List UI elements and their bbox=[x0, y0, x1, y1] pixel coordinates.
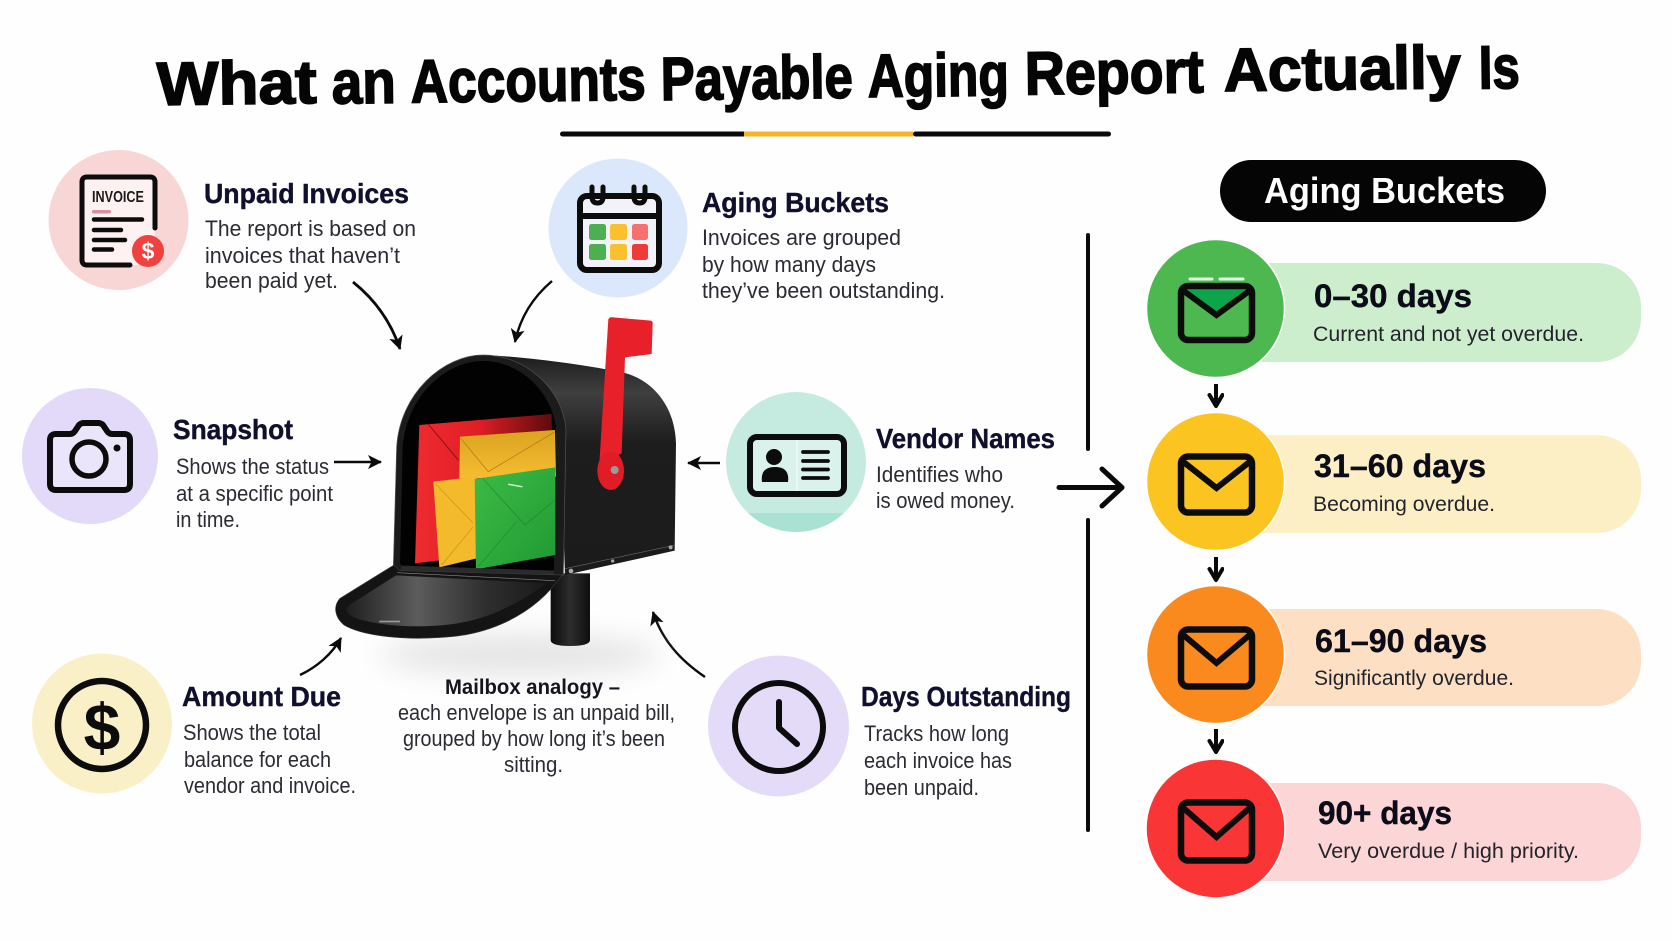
text block bbox=[205, 216, 416, 293]
yellow envelope back bbox=[459, 430, 556, 478]
circle bbox=[1146, 759, 1285, 898]
text block: at a specific point bbox=[176, 481, 333, 506]
mailbox post bbox=[551, 573, 590, 646]
title: Accounts bbox=[410, 45, 646, 115]
mailbox analogy caption: sitting. bbox=[504, 752, 563, 777]
bucket: 31-60 days bbox=[1146, 412, 1641, 550]
description: Becoming overdue. bbox=[1313, 492, 1495, 516]
arrow bbox=[688, 462, 720, 464]
title: an bbox=[331, 48, 396, 116]
bucket: 61-90 days bbox=[1146, 586, 1641, 724]
text block: Shows the status bbox=[176, 454, 329, 479]
text block: vendor and invoice. bbox=[184, 773, 356, 798]
pill bbox=[1216, 435, 1641, 533]
panel: vendor names bbox=[688, 392, 1055, 535]
title: Aging bbox=[867, 40, 1009, 110]
icon: invoice: INVOICE bbox=[92, 189, 144, 206]
panel: unpaid invoices bbox=[48, 150, 416, 349]
heading: Unpaid Invoices bbox=[204, 178, 409, 209]
heading pill: aging buckets: Aging Buckets bbox=[1264, 170, 1505, 211]
label: 90+ days bbox=[1318, 795, 1452, 831]
text block: is owed money. bbox=[876, 488, 1015, 513]
mailbox shadow bbox=[380, 635, 660, 675]
text block bbox=[183, 720, 356, 798]
mailbox opening bbox=[400, 361, 556, 571]
circle bbox=[1146, 412, 1284, 550]
heading pill: aging buckets bbox=[1220, 160, 1546, 222]
mailbox rivets bbox=[565, 545, 674, 573]
icon: dollar coin: $ bbox=[84, 690, 120, 764]
text block bbox=[702, 225, 945, 303]
circle bbox=[1146, 586, 1284, 724]
text block bbox=[864, 721, 1012, 800]
text block: Identifies who bbox=[876, 462, 1003, 487]
mailbox door bbox=[336, 565, 562, 638]
pill bbox=[1216, 783, 1641, 881]
label: 31–60 days bbox=[1314, 448, 1486, 484]
icon: calendar bbox=[548, 158, 688, 298]
heading: Days Outstanding bbox=[861, 681, 1071, 712]
text block bbox=[176, 454, 333, 532]
icon: dollar coin bbox=[32, 654, 172, 794]
icon: invoice bbox=[48, 150, 188, 290]
panel: snapshot bbox=[22, 388, 381, 532]
text block: The report is based on bbox=[205, 216, 416, 241]
green envelope bbox=[475, 467, 555, 569]
mailbox analogy caption: each envelope is an unpaid bill, bbox=[398, 700, 675, 725]
title: Report bbox=[1024, 37, 1204, 107]
title: What bbox=[156, 48, 317, 118]
divider with arrow to buckets bbox=[1059, 235, 1122, 830]
icon: envelope bbox=[1181, 456, 1252, 512]
pill bbox=[1216, 609, 1641, 706]
arrow bbox=[515, 281, 552, 342]
bucket: 90+ days bbox=[1146, 759, 1641, 898]
text block: been unpaid. bbox=[864, 775, 979, 800]
mailbox analogy caption bbox=[398, 676, 675, 777]
label: 0–30 days bbox=[1314, 278, 1472, 314]
text block: they’ve been outstanding. bbox=[702, 278, 945, 303]
circle bbox=[1146, 240, 1284, 378]
title bbox=[156, 33, 1520, 118]
panel: amount due bbox=[32, 638, 356, 798]
description: Current and not yet overdue. bbox=[1313, 322, 1584, 346]
heading: Amount Due bbox=[182, 681, 341, 712]
red envelope bbox=[415, 414, 554, 563]
yellow envelope front bbox=[433, 477, 477, 567]
text block: been paid yet. bbox=[205, 268, 338, 293]
mailbox flag bbox=[597, 317, 653, 490]
icon: invoice: $ bbox=[142, 238, 155, 264]
panel: aging buckets note bbox=[515, 158, 945, 342]
text block: balance for each bbox=[184, 747, 331, 772]
icon: clock bbox=[708, 656, 849, 796]
text block bbox=[876, 462, 1015, 513]
description: Significantly overdue. bbox=[1314, 666, 1514, 690]
text block: each invoice has bbox=[864, 748, 1012, 773]
icon: camera bbox=[22, 388, 158, 524]
icon: envelope bbox=[1181, 802, 1252, 860]
arrow bbox=[1214, 384, 1218, 406]
arrow bbox=[300, 638, 341, 675]
icon: vendor id card bbox=[726, 392, 866, 535]
mailbox front rim bbox=[393, 355, 566, 575]
text block: by how many days bbox=[702, 252, 876, 277]
arrow bbox=[334, 461, 381, 463]
heading: Aging Buckets bbox=[702, 187, 889, 218]
heading: Snapshot bbox=[173, 414, 293, 445]
pill bbox=[1216, 263, 1641, 362]
text block: Shows the total bbox=[183, 720, 321, 745]
mailbox inner floor bbox=[400, 566, 554, 577]
heading: Vendor Names bbox=[876, 423, 1055, 454]
mailbox analogy caption: grouped by how long it’s been bbox=[403, 726, 665, 751]
description: Very overdue / high priority. bbox=[1318, 839, 1579, 863]
label: 61–90 days bbox=[1315, 623, 1487, 659]
title: Actually bbox=[1223, 33, 1461, 104]
mailbox illustration bbox=[336, 317, 676, 646]
arrow bbox=[353, 282, 400, 349]
icon: envelope bbox=[1181, 630, 1252, 686]
title underline bbox=[560, 132, 1111, 136]
text block: in time. bbox=[176, 507, 240, 532]
title: Payable bbox=[660, 43, 853, 113]
mailbox analogy caption: Mailbox analogy – bbox=[445, 676, 620, 699]
arrow bbox=[1214, 557, 1218, 580]
bucket: 0-30 days bbox=[1146, 240, 1641, 378]
text block: invoices that haven’t bbox=[205, 243, 400, 268]
title: Is bbox=[1478, 33, 1520, 101]
text block: Invoices are grouped bbox=[702, 225, 901, 250]
panel: days outstanding bbox=[653, 612, 1071, 800]
text block: Tracks how long bbox=[864, 721, 1009, 746]
arrow bbox=[653, 612, 705, 677]
arrow bbox=[1214, 729, 1218, 752]
mailbox body bbox=[483, 355, 676, 575]
icon: envelope bbox=[1181, 279, 1252, 340]
